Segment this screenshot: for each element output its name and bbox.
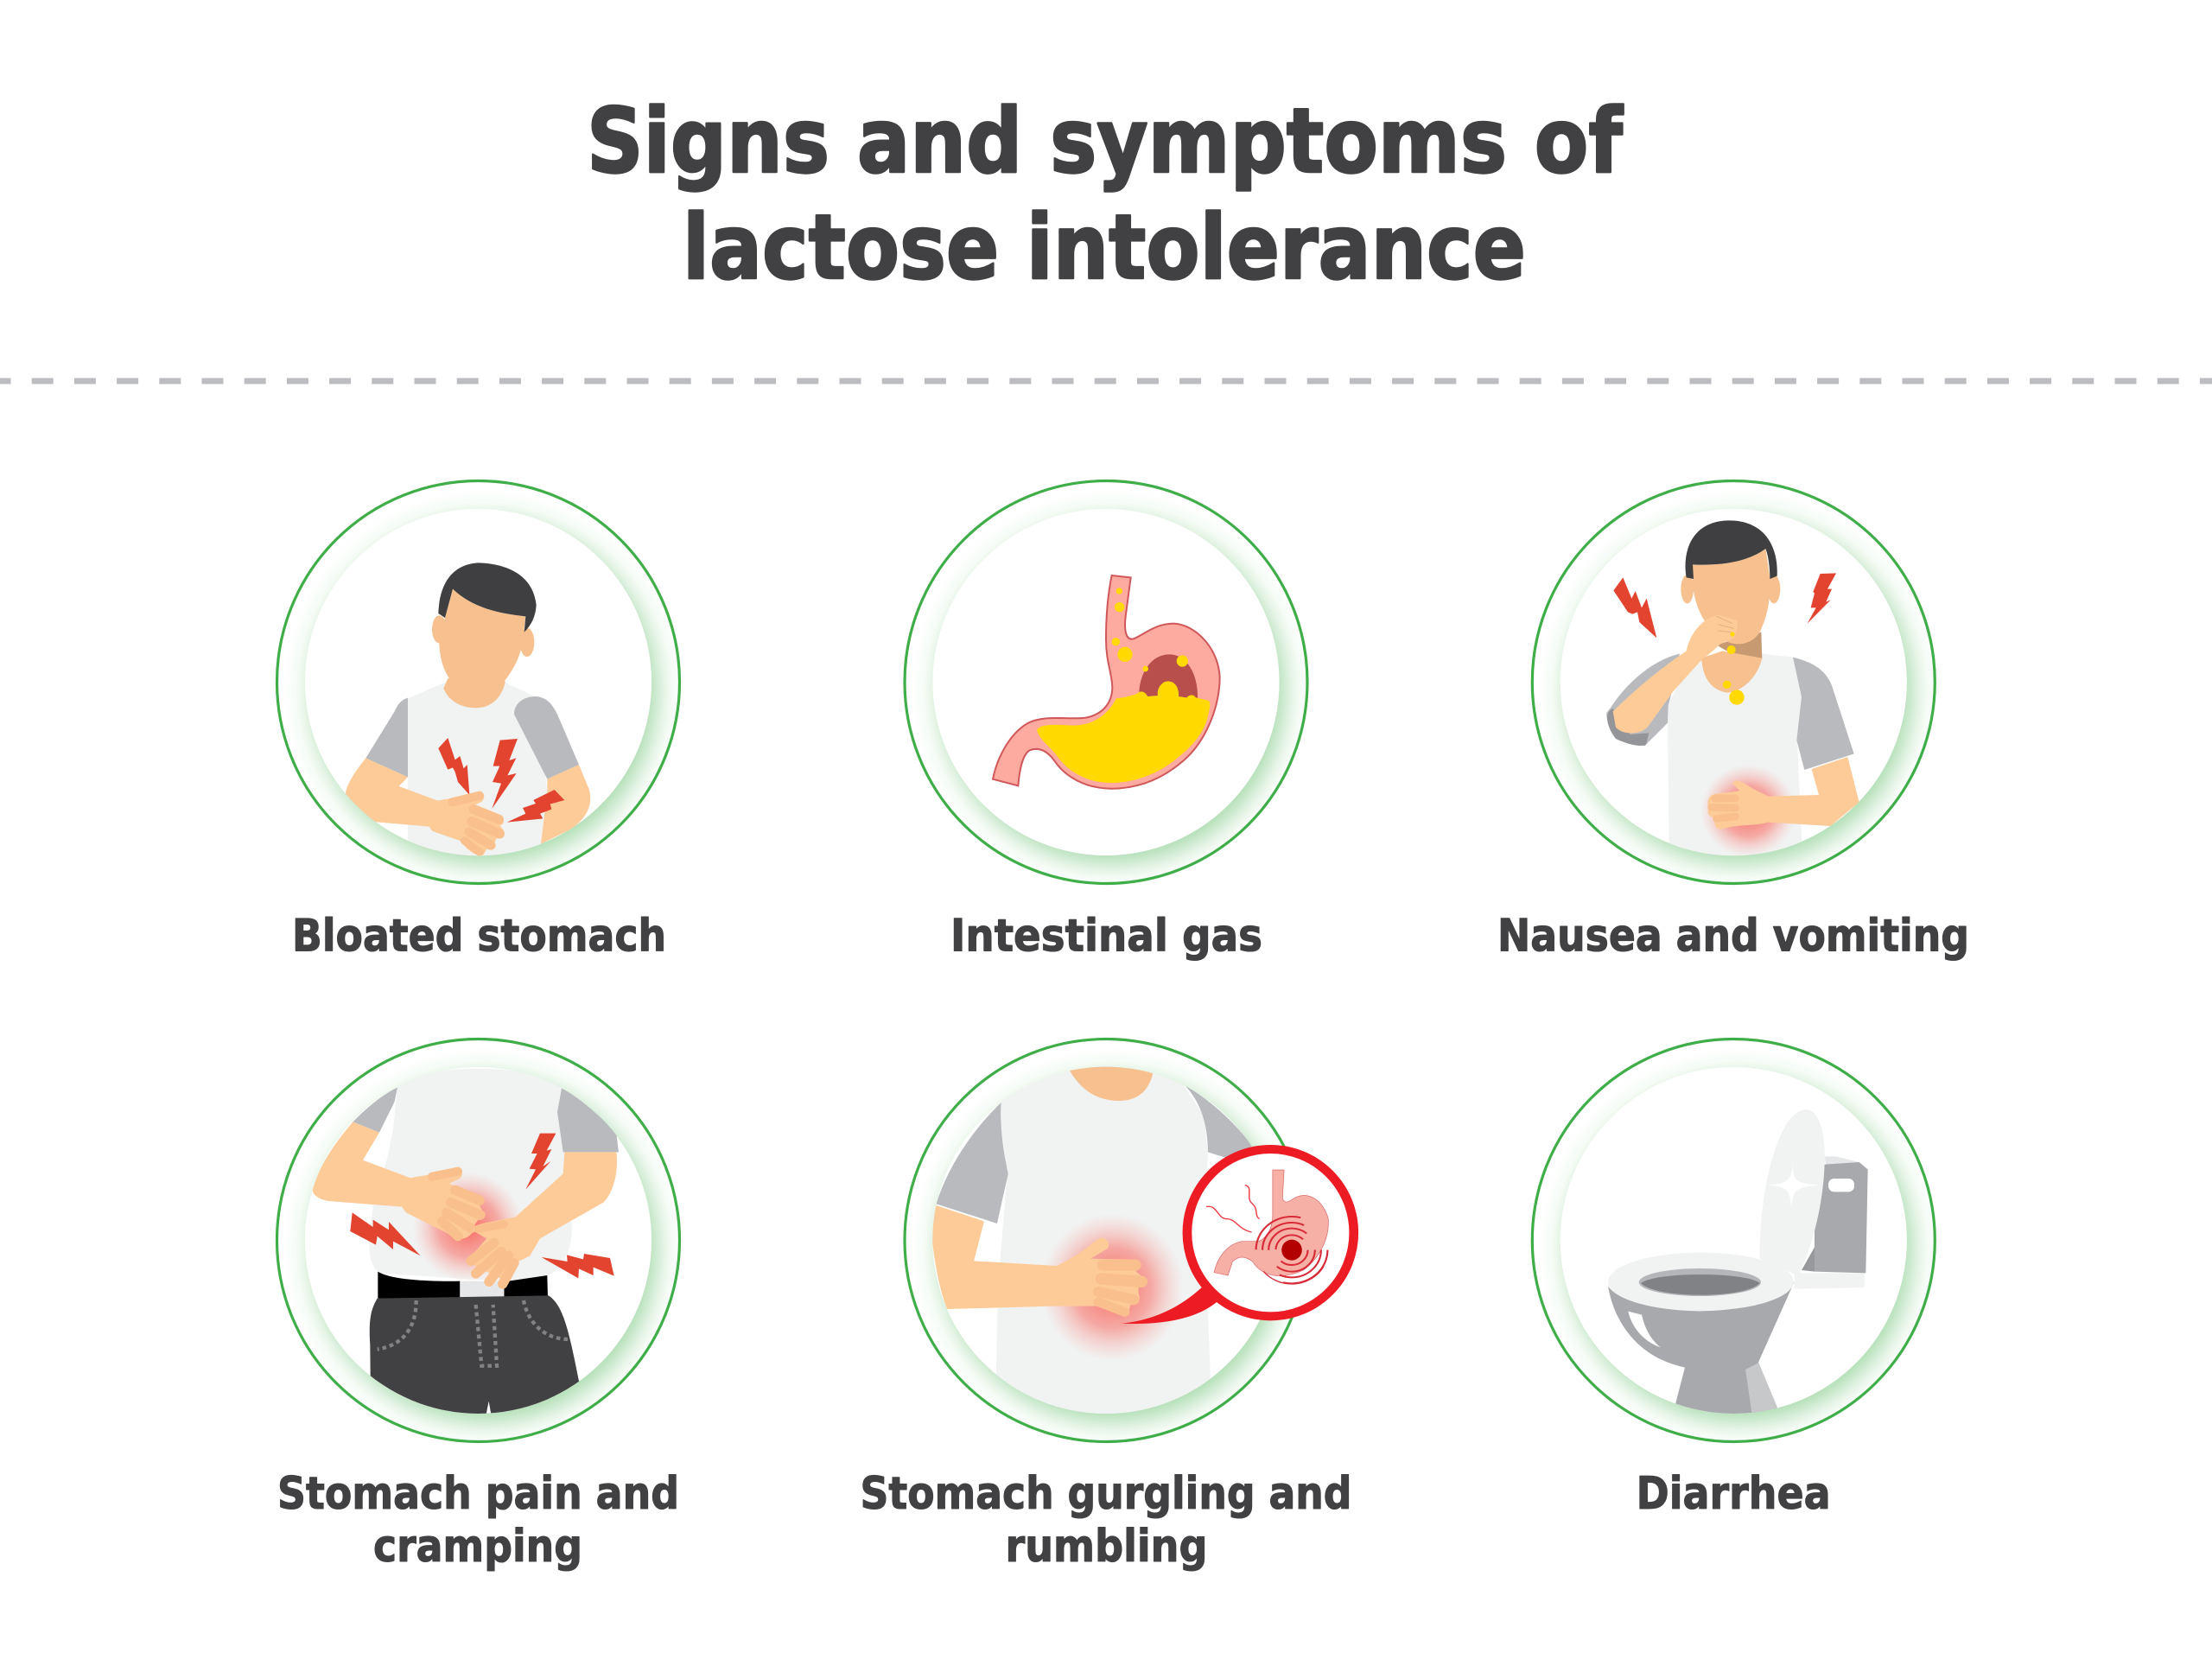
label: Stomach pain and xyxy=(277,1468,679,1520)
panel: intestinal gas xyxy=(905,480,1307,963)
trousers xyxy=(370,1295,579,1414)
ring xyxy=(905,480,1307,883)
right arm xyxy=(467,1152,617,1281)
ring xyxy=(276,1039,679,1441)
illustration: man vomiting xyxy=(1606,520,1859,870)
illustration: toilet xyxy=(1608,1109,1868,1432)
label: rumbling xyxy=(1006,1521,1208,1573)
title: Signs and symptoms of xyxy=(587,90,1624,194)
illustration: man holding bloated stomach xyxy=(345,563,590,870)
label: Bloated stomach xyxy=(292,911,666,963)
panel: diarrhea xyxy=(1532,1039,1935,1520)
arm and hand xyxy=(345,758,505,855)
ring xyxy=(905,1039,1307,1441)
left arm xyxy=(313,1122,484,1239)
arm and hand xyxy=(930,1204,1146,1316)
ring xyxy=(1532,480,1935,883)
ring xyxy=(276,480,679,883)
illustration: torso with hand on stomach xyxy=(930,1062,1253,1432)
sleeves xyxy=(1606,654,1680,746)
stomach glow xyxy=(1704,767,1790,854)
callout: stomach rumbling xyxy=(1122,1149,1354,1324)
label: Stomach gurgling and xyxy=(861,1468,1351,1520)
ring xyxy=(1532,1039,1935,1441)
panel: nausea and vomiting xyxy=(1497,480,1969,963)
right arm xyxy=(1707,757,1859,830)
title xyxy=(587,90,1624,300)
bowl xyxy=(1608,1282,1794,1414)
label: Diarrhea xyxy=(1637,1468,1831,1520)
pain glow xyxy=(416,1176,518,1278)
lid xyxy=(1760,1109,1825,1276)
bolts xyxy=(1613,573,1836,638)
panel: bloated stomach xyxy=(276,480,679,963)
label: Intestinal gas xyxy=(950,911,1262,963)
panel: stomach gurgling and rumbling xyxy=(861,1039,1354,1573)
panel: stomach pain and cramping xyxy=(276,1039,679,1573)
seat xyxy=(1608,1253,1794,1311)
belt xyxy=(378,1272,460,1299)
hair xyxy=(438,563,537,632)
pain glow xyxy=(1049,1219,1179,1356)
label xyxy=(861,1468,1351,1573)
label: cramping xyxy=(373,1521,582,1573)
forearm and hand xyxy=(1613,615,1738,734)
vomit dots xyxy=(1723,632,1745,705)
title: lactose intolerance xyxy=(683,196,1526,300)
label xyxy=(277,1468,679,1573)
bolts xyxy=(438,738,564,823)
illustration: stomach with gas xyxy=(993,575,1220,789)
hair xyxy=(1685,520,1777,579)
illustration: torso with cramps xyxy=(313,1069,619,1432)
label: Nausea and vomiting xyxy=(1497,911,1969,963)
bolts xyxy=(350,1134,614,1278)
